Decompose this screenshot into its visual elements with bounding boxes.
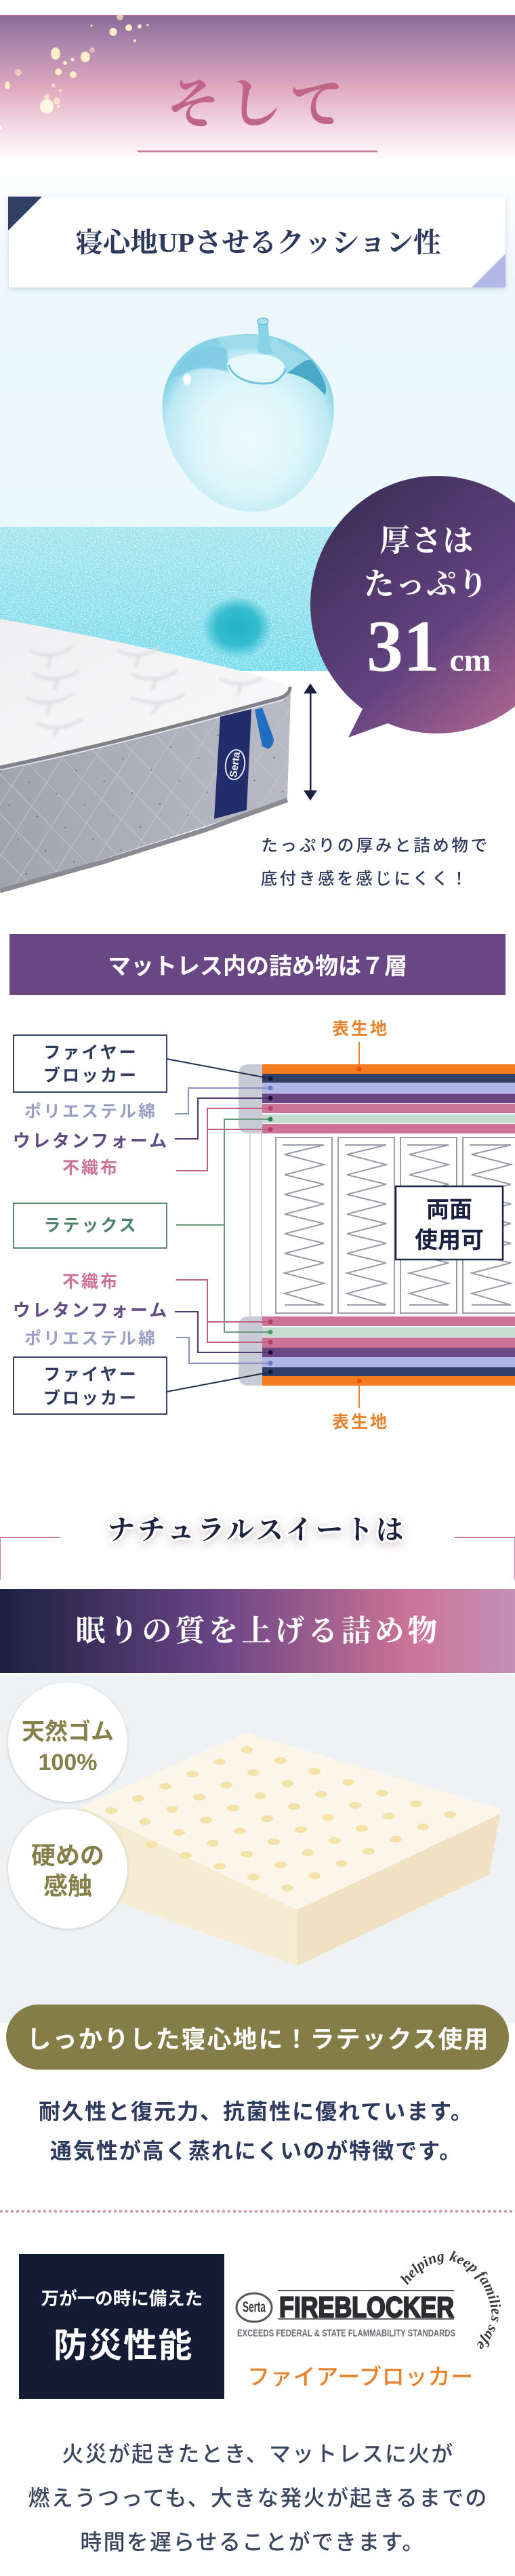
text block: fire description: 火災が起きたとき、マットレスに火が	[62, 2442, 455, 2466]
structure lines	[250, 1133, 262, 1316]
logo mark: Serta	[243, 2298, 266, 2316]
foam dent	[202, 596, 272, 658]
panel: disaster performance: 万が一の時に備えた	[41, 2289, 203, 2309]
brand logo	[224, 748, 247, 781]
logo: fireblocker: FIREBLOCKER	[279, 2291, 454, 2324]
icon: glass apple	[163, 318, 334, 512]
callout: reversible: 両面	[426, 1197, 472, 1223]
brand logo: Serta	[228, 751, 243, 778]
callout: thickness bubble	[310, 476, 515, 738]
sparkles	[0, 14, 149, 129]
badge: natural rubber: 100%	[39, 1750, 97, 1775]
panel: disaster performance: 防災性能	[54, 2327, 193, 2364]
label: top fabric: 表生地	[332, 1020, 389, 1039]
upper layers	[239, 1064, 515, 1133]
panel: latex	[0, 1674, 515, 2024]
panel: subtitle card	[8, 197, 506, 287]
text block: thickness note: たっぷりの厚みと詰め物で	[261, 837, 490, 856]
logo: fireblocker	[236, 2251, 501, 2349]
heading: natural suite: ナチュラルスイートは	[108, 1514, 406, 1546]
callout: reversible	[396, 1186, 503, 1260]
text block: fire description	[28, 2442, 489, 2554]
label: polyester top: ポリエステル綿	[24, 1102, 157, 1121]
label: bottom fabric: 表生地	[332, 1413, 389, 1432]
label: urethane top: ウレタンフォーム	[13, 1131, 169, 1151]
text block: thickness note: 底付き感を感じにくく！	[261, 869, 470, 888]
banner: latex pill	[6, 2005, 509, 2070]
bubble number: 31	[367, 606, 440, 687]
label box: fire blocker bottom: ブロッカー	[43, 1388, 138, 1408]
header band	[0, 14, 515, 160]
banner: filling quality: 眠りの質を上げる詰め物	[76, 1615, 440, 1647]
text block: thickness note	[261, 837, 490, 888]
mattress top	[0, 619, 291, 767]
subtitle text: 寝心地UPさせるクッション性	[75, 228, 441, 258]
brand band	[214, 709, 251, 819]
text block: latex description	[39, 2099, 474, 2163]
blue tag	[255, 708, 274, 749]
badge: natural rubber: 天然ゴム	[22, 1718, 114, 1745]
badge: natural rubber	[8, 1683, 127, 1802]
label: urethane bottom: ウレタンフォーム	[13, 1300, 169, 1321]
logo mark	[236, 2293, 272, 2322]
mattress side panel	[0, 693, 291, 892]
arrow: thickness	[304, 683, 317, 801]
latex holes	[105, 1746, 456, 1891]
text block: latex description: 耐久性と復元力、抗菌性に優れています。	[39, 2099, 474, 2124]
text block: latex description: 通気性が高く蒸れにくいのが特徴です。	[50, 2139, 462, 2163]
logo slogan: helping keep families safe	[400, 2251, 501, 2349]
heading: seven layers: マットレス内の詰め物は７層	[108, 954, 407, 980]
latex block	[81, 1733, 501, 1966]
chart: mattress cross section	[13, 1020, 515, 1432]
badge: firm feel: 感触	[43, 1872, 92, 1899]
leader dots	[268, 1067, 362, 1383]
label: nonwoven top: 不織布	[62, 1159, 119, 1178]
badge: firm feel	[8, 1809, 127, 1929]
label box: latex: ラテックス	[43, 1216, 138, 1235]
title: そして	[167, 75, 351, 135]
corner triangle navy	[8, 197, 42, 230]
panel: disaster performance	[19, 2254, 224, 2399]
mattress piping	[0, 687, 290, 767]
spring units	[276, 1138, 515, 1313]
banner: filling quality	[0, 1589, 515, 1673]
label box: fire blocker top	[14, 1035, 167, 1092]
label box: fire blocker bottom	[14, 1357, 167, 1414]
banner: latex pill: しっかりした寝心地に！ラテックス使用	[27, 2026, 489, 2053]
mattress tufting	[27, 647, 261, 736]
corner triangle lavender	[472, 254, 506, 287]
heading: seven layers	[9, 934, 506, 995]
label box: latex	[14, 1203, 167, 1248]
leader lines	[167, 1042, 359, 1408]
label box: fire blocker top: ファイヤー	[43, 1043, 138, 1062]
label box: fire blocker bottom: ファイヤー	[43, 1365, 138, 1384]
heading: natural suite	[0, 1514, 515, 1579]
foam block	[0, 527, 515, 671]
badge: firm feel: 硬めの	[31, 1841, 104, 1870]
text block: fire description: 時間を遅らせることができます。	[80, 2530, 426, 2554]
sky background	[0, 160, 515, 529]
mattress	[0, 619, 291, 892]
lower layers	[239, 1316, 515, 1386]
text block: fire description: 燃えうつっても、大きな発火が起きるまでの	[28, 2486, 489, 2510]
label: nonwoven bottom: 不織布	[62, 1272, 119, 1291]
bubble unit: cm	[449, 643, 491, 678]
bubble text 2: たっぷり	[364, 567, 489, 601]
label: fire blocker: ファイアーブロッカー	[247, 2364, 474, 2389]
callout: reversible: 使用可	[415, 1228, 484, 1253]
label box: fire blocker top: ブロッカー	[43, 1066, 138, 1085]
bubble text 1: 厚さは	[379, 524, 474, 558]
label: polyester bottom: ポリエステル綿	[24, 1329, 157, 1348]
